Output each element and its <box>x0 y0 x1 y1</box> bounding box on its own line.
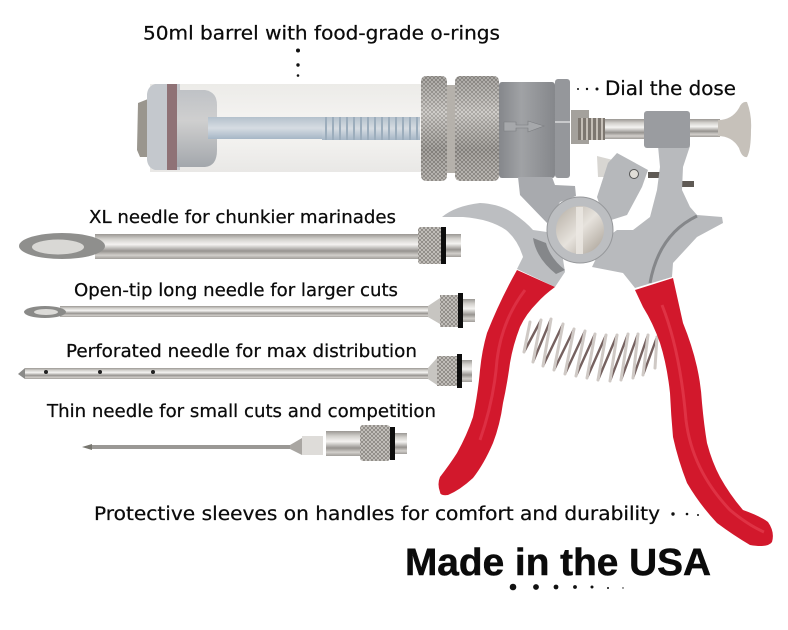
grey dial <box>499 82 555 178</box>
front coils <box>524 319 657 381</box>
left red sleeve <box>438 270 555 495</box>
point <box>18 368 25 379</box>
wedge <box>597 156 613 177</box>
dots: sleeve pointer <box>671 512 699 516</box>
cone <box>428 358 437 385</box>
thread <box>446 234 461 257</box>
label: protective sleeves: Protective sleeves on handles for comfort and durability <box>94 504 660 525</box>
dial collar <box>555 79 570 178</box>
block on rod <box>644 111 690 148</box>
left wing <box>442 203 565 287</box>
o-ring <box>167 84 177 170</box>
barrel end cap <box>147 84 180 170</box>
lever lug <box>518 177 576 223</box>
small nut <box>571 110 589 144</box>
black o-ring <box>457 354 462 388</box>
shaft <box>25 368 428 379</box>
back coils <box>524 319 657 381</box>
knurled collar <box>360 425 390 461</box>
shaft <box>90 445 290 449</box>
right red sleeve <box>635 278 773 546</box>
knurled collar <box>418 227 442 264</box>
plunger rod <box>605 119 645 139</box>
right arm <box>592 146 723 288</box>
label: XL needle: XL needle for chunkier marinades <box>89 208 396 228</box>
spring <box>524 319 657 381</box>
holes <box>44 370 155 374</box>
thread <box>578 118 605 140</box>
arrow mark on dial <box>504 121 544 132</box>
needle: thin <box>82 425 407 461</box>
label: open-tip needle: Open-tip long needle for larger cuts <box>74 281 398 301</box>
collar <box>326 431 360 456</box>
label: thin needle: Thin needle for small cuts and competition <box>46 402 436 422</box>
threaded rod <box>322 117 420 140</box>
knurled collar <box>440 295 458 327</box>
barrel tube <box>150 84 425 172</box>
dots: title underline <box>510 584 624 590</box>
pistol frame <box>442 111 723 288</box>
shaft <box>60 306 428 317</box>
steel hub disc <box>556 206 604 254</box>
cone <box>428 298 440 324</box>
sheen on nut 1 <box>421 76 447 181</box>
knurled collar <box>437 356 457 386</box>
thread <box>462 360 472 382</box>
thread <box>463 299 475 322</box>
hex fitting <box>302 436 323 455</box>
plunger head <box>718 102 751 157</box>
sheen on nut 2 <box>455 76 499 181</box>
neck <box>447 85 456 173</box>
barrel assembly <box>137 84 425 172</box>
hub <box>290 438 302 455</box>
black o-ring <box>390 427 395 460</box>
title: made in the USA: Made in the USA <box>405 541 711 583</box>
shaft <box>95 234 418 259</box>
needle: XL <box>19 227 461 264</box>
trigger plate <box>597 153 648 222</box>
dots: dial pointer <box>577 88 598 90</box>
knurled nut 2 <box>455 76 499 181</box>
label: dial the dose: Dial the dose <box>605 77 736 100</box>
hex nut <box>137 99 148 157</box>
dots: barrel pointer <box>296 48 300 77</box>
piston <box>177 90 217 167</box>
point <box>82 444 92 450</box>
black o-ring <box>458 293 463 328</box>
rod <box>208 117 322 139</box>
heading: barrel label: 50ml barrel with food-grade o-rings <box>143 24 500 44</box>
screw stubs <box>648 172 694 187</box>
needle: perforated <box>18 354 472 388</box>
knurled nut 1 <box>421 76 447 181</box>
open tip <box>24 306 66 318</box>
open tip <box>19 233 105 259</box>
needle: open-tip <box>24 293 475 328</box>
black o-ring <box>441 227 446 264</box>
thread <box>395 433 407 454</box>
label: perforated needle: Perforated needle for max distribution <box>66 342 417 362</box>
dose mechanism <box>421 76 751 181</box>
hub <box>547 197 613 263</box>
